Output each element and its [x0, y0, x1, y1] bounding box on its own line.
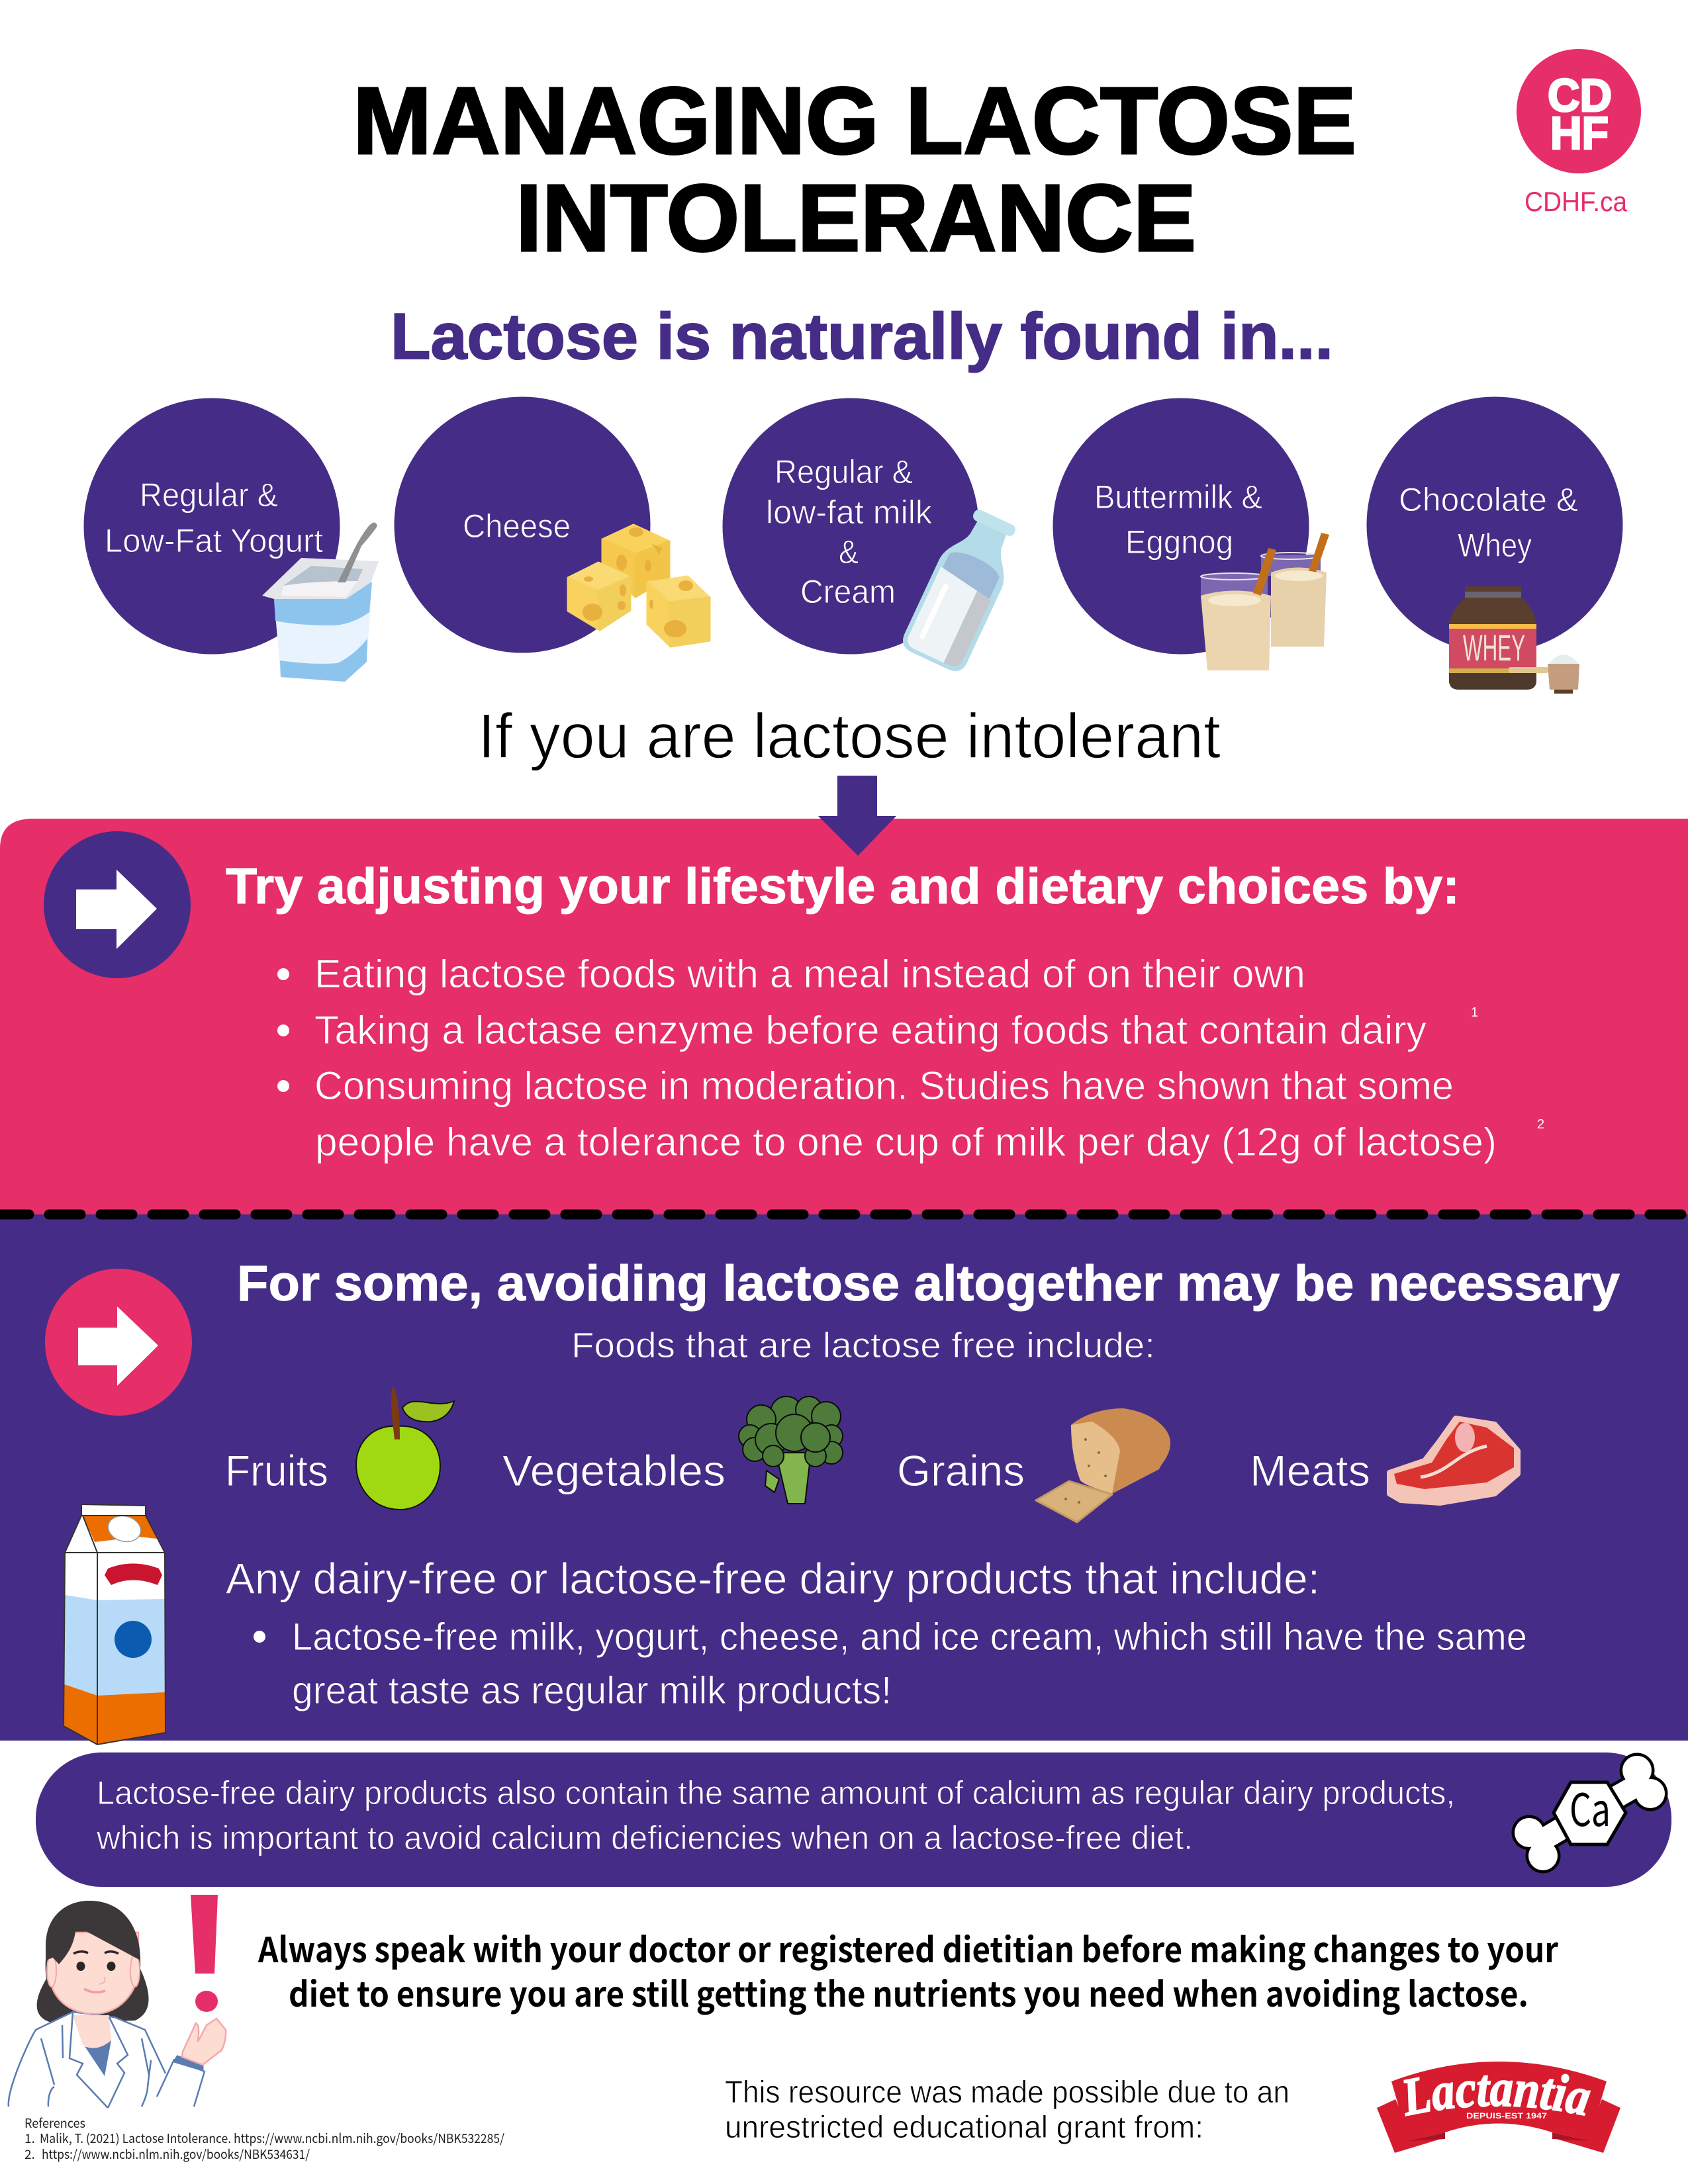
panel: calcium callout: Lactose-free dairy products also contain the same amount of calcium as regular dairy products,	[97, 1774, 1455, 1811]
heading: if you are lactose intolerant: If you are lactose intolerant	[478, 701, 1221, 772]
label: vegetables: Vegetables	[502, 1446, 726, 1495]
text block: doctor advice: diet to ensure you are still getting the nutrients you need when avoiding lactose.	[289, 1967, 1528, 2017]
panel: buttermilk: Eggnog	[1125, 523, 1233, 561]
text block: lifestyle bullets: 1	[1471, 1005, 1478, 1020]
panel: whey: Chocolate &	[1399, 481, 1578, 518]
text: dairy-free products: great taste as regular milk products!	[292, 1669, 892, 1712]
text block: lifestyle bullets: 2	[1537, 1117, 1544, 1132]
icon: down arrow	[818, 776, 896, 856]
text block: lifestyle bullets	[277, 952, 1544, 1164]
logo: Lactantia: Lactantia	[1403, 2074, 1591, 2116]
text: grant acknowledgement	[725, 2074, 1289, 2144]
text: dairy-free products: Lactose-free milk, yogurt, cheese, and ice cream, which still have the same	[292, 1615, 1527, 1659]
icon: broccoli	[739, 1396, 843, 1504]
panel: cheese: Cheese	[463, 508, 571, 545]
text block: doctor advice: Always speak with your doctor or registered dietitian before making changes to your	[258, 1923, 1558, 1972]
icon: whey tub	[1449, 586, 1579, 694]
icon: doctor	[9, 1901, 226, 2108]
logo: CDHF: CDHF.ca	[1524, 186, 1628, 217]
icon: eggnog glasses	[1201, 533, 1329, 670]
panel: whey	[1366, 397, 1623, 694]
icon: arrow circle pink	[45, 1269, 192, 1416]
label: meats: Meats	[1250, 1446, 1370, 1495]
panel: cheese	[395, 397, 710, 653]
text: dairy-free products	[226, 1554, 1527, 1712]
panel: calcium callout	[36, 1752, 1671, 1887]
label: fruits: Fruits	[225, 1446, 328, 1495]
heading: try adjusting: Try adjusting your lifestyle and dietary choices by:	[226, 858, 1460, 915]
label: grains: Grains	[897, 1446, 1025, 1495]
title: MANAGING LACTOSE	[353, 68, 1356, 174]
logo: CDHF	[1517, 49, 1641, 217]
logo: CDHF: CD	[1548, 69, 1612, 121]
title	[353, 68, 1356, 271]
icon: yogurt cup	[262, 522, 379, 682]
text block: lifestyle bullets: Taking a lactase enzyme before eating foods that contain dairy	[314, 1008, 1427, 1052]
logo: Lactantia: DEPUIS-EST 1947	[1466, 2111, 1547, 2120]
panel: calcium callout: which is important to avoid calcium deficiencies when on a lactose-free diet.	[96, 1819, 1193, 1856]
icon: arrow circle purple	[44, 831, 191, 978]
icon: cheese cubes	[568, 525, 710, 647]
text: references	[24, 2114, 505, 2163]
panel: milk: Cream	[800, 573, 896, 610]
icon: whey tub: WHEY	[1463, 627, 1525, 668]
logo: Lactantia	[1377, 2062, 1620, 2153]
icon: milk bottle	[899, 503, 1028, 675]
icon: exclamation mark	[191, 1895, 218, 2012]
text: grant acknowledgement: This resource was made possible due to an	[725, 2074, 1289, 2109]
panel: lifestyle	[0, 776, 1688, 1214]
text: foods lactose free: Foods that are lactose free include:	[571, 1326, 1155, 1365]
panel: milk: low-fat milk	[766, 494, 933, 531]
text block: lifestyle bullets: Eating lactose foods with a meal instead of on their own	[314, 952, 1305, 996]
text: references: 1.	[24, 2129, 35, 2147]
text: references: 2.	[24, 2145, 35, 2163]
icon: bread	[1036, 1408, 1170, 1522]
panel: milk: Regular &	[774, 453, 913, 490]
panel: milk	[723, 398, 1028, 675]
panel: whey: Whey	[1458, 527, 1532, 564]
logo: CDHF: HF	[1550, 107, 1609, 159]
icon: calcium bone: Ca	[1570, 1774, 1611, 1839]
text block: lifestyle bullets: people have a tolerance to one cup of milk per day (12g of lactose)	[315, 1120, 1497, 1164]
text block: lifestyle bullets: Consuming lactose in moderation. Studies have shown that some	[314, 1064, 1454, 1108]
text: grant acknowledgement: unrestricted educational grant from:	[725, 2109, 1203, 2144]
text: references: Malik, T. (2021) Lactose Intolerance. https://www.ncbi.nlm.nih.gov/books/NBK532285/	[40, 2129, 505, 2147]
panel: yogurt: Regular &	[140, 477, 278, 514]
panel: buttermilk: Buttermilk &	[1094, 478, 1262, 516]
icon: steak	[1389, 1418, 1518, 1503]
title: INTOLERANCE	[516, 165, 1196, 271]
text: references: References	[24, 2114, 85, 2132]
heading: for some: For some, avoiding lactose altogether may be necessary	[237, 1255, 1620, 1312]
panel: avoiding lactose	[0, 1214, 1688, 1741]
icon: apple	[356, 1385, 454, 1510]
text: references: https://www.ncbi.nlm.nih.gov/books/NBK534631/	[42, 2145, 310, 2163]
panel: yogurt	[83, 398, 379, 682]
subtitle: Lactose is naturally found in...	[391, 300, 1333, 373]
icon: calcium bone	[1512, 1752, 1668, 1873]
panel: buttermilk	[1053, 398, 1329, 670]
panel: yogurt: Low-Fat Yogurt	[105, 522, 323, 559]
text block: doctor advice	[258, 1923, 1558, 2017]
icon: milk carton	[64, 1504, 165, 1745]
text: dairy-free products: Any dairy-free or lactose-free dairy products that include:	[226, 1554, 1320, 1603]
panel: milk: &	[839, 533, 859, 570]
